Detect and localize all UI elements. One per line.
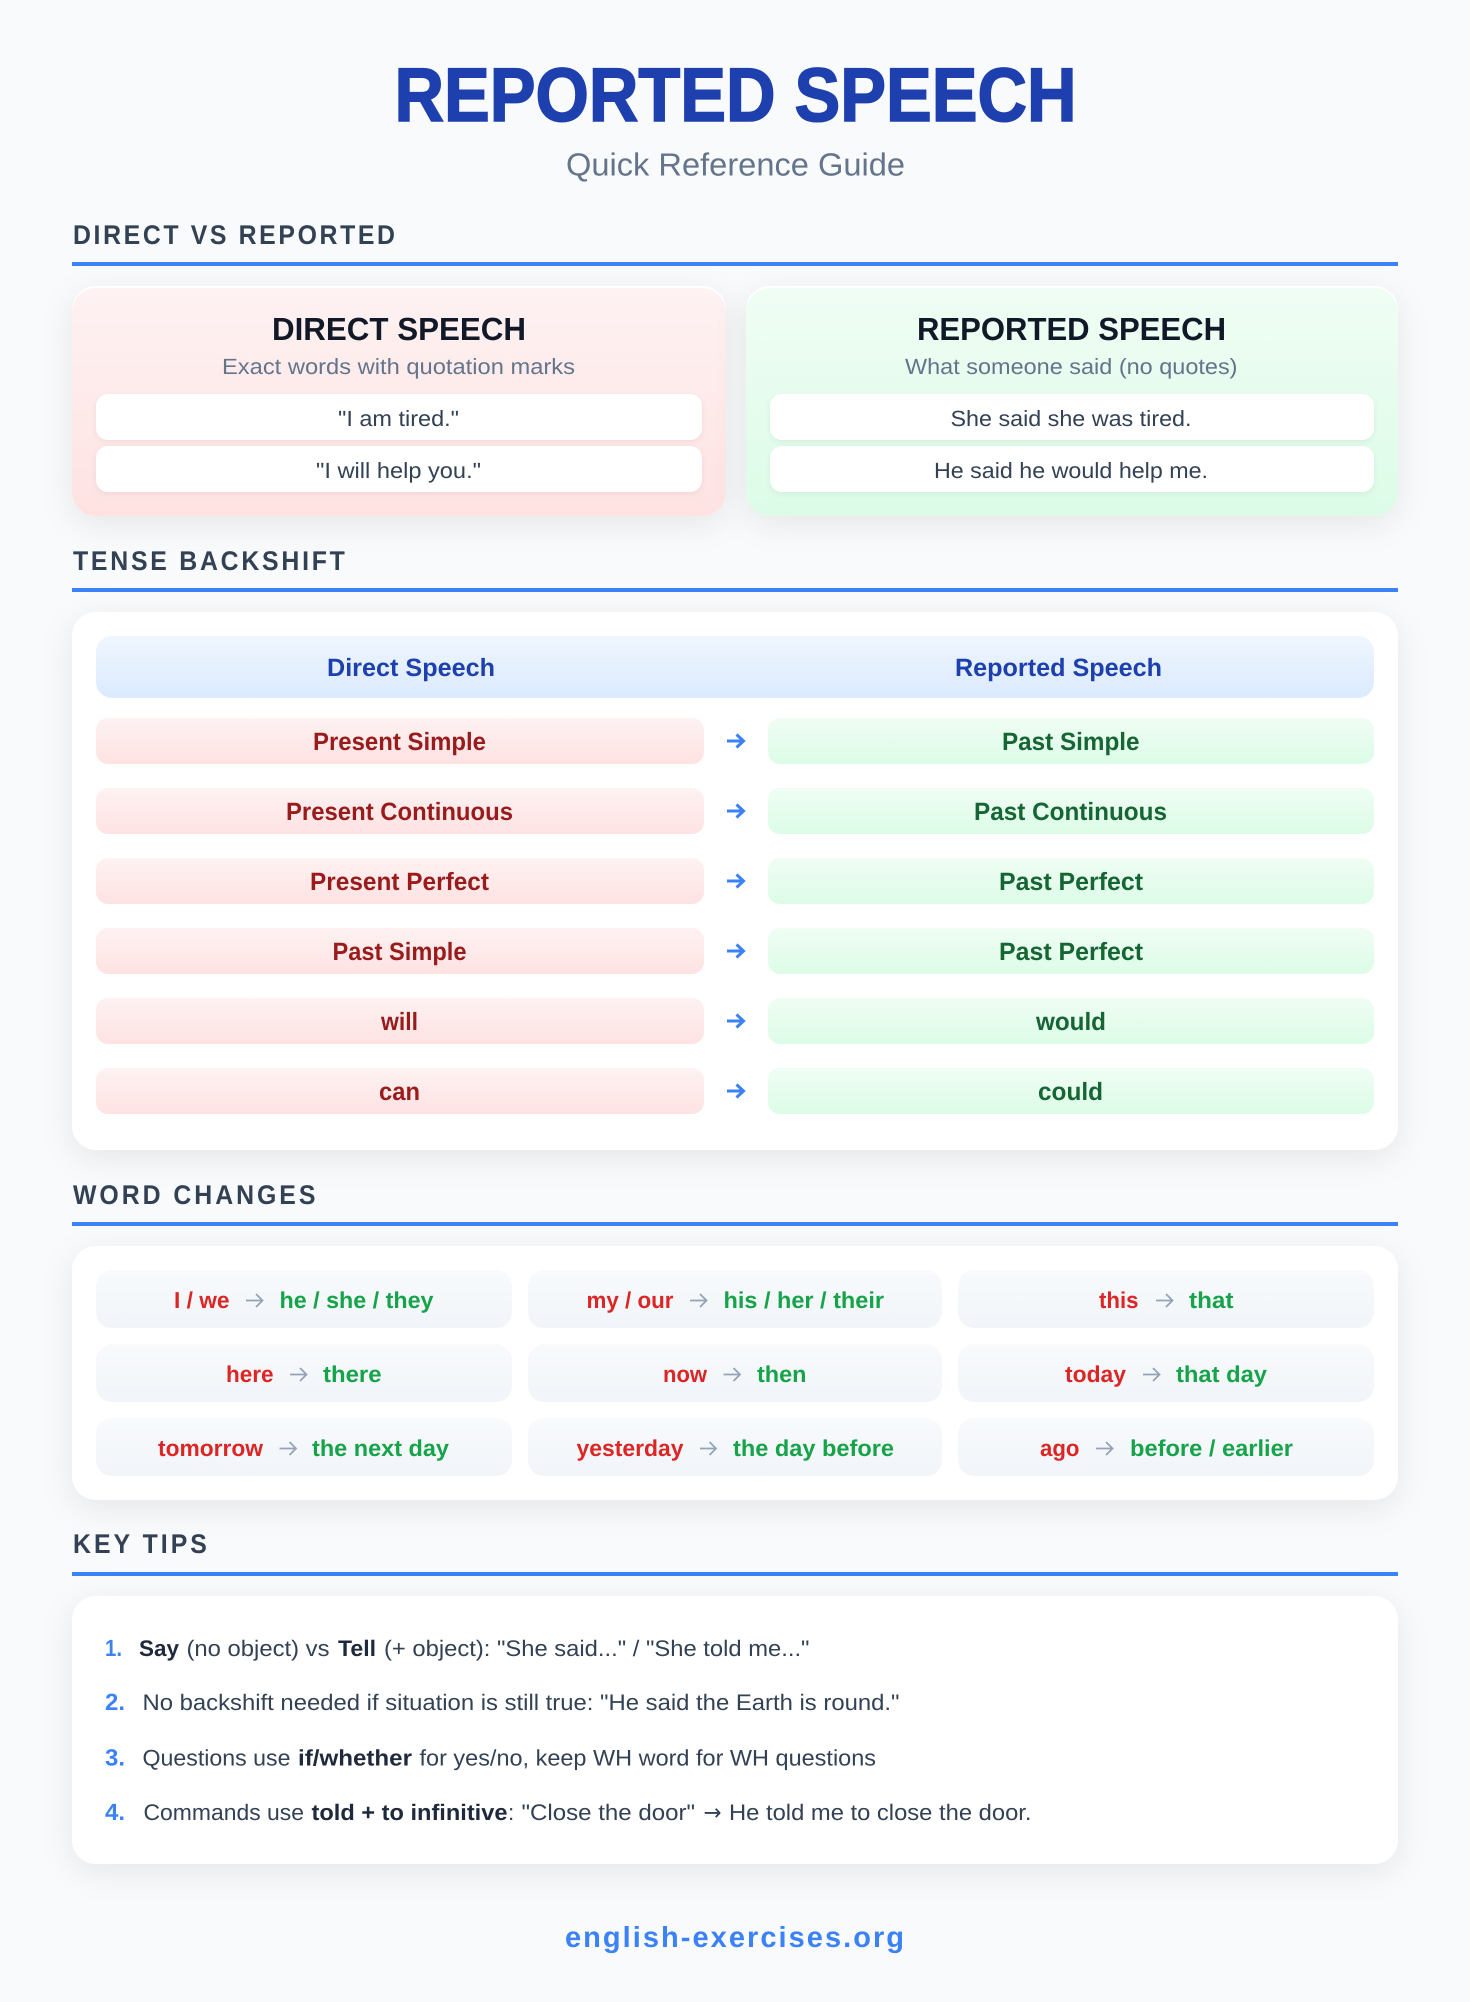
row: past simple: Past Perfect <box>999 938 1144 966</box>
cell: here <box>96 1344 512 1402</box>
cell: here: there <box>323 1361 382 1387</box>
cell: tomorrow <box>96 1418 512 1476</box>
cell: ago <box>958 1418 1374 1476</box>
cell: today: that day <box>1176 1361 1267 1387</box>
cell: my / our <box>528 1270 942 1328</box>
reported example 1 <box>770 394 1374 440</box>
cell: I / we: he / she / they <box>280 1287 434 1313</box>
row: present perfect <box>96 858 1374 904</box>
cell: ago: before / earlier <box>1130 1435 1293 1461</box>
tip 4: Commands use <box>144 1800 304 1825</box>
table header <box>96 636 1374 698</box>
row: will <box>96 998 1374 1044</box>
cell: this <box>958 1270 1374 1328</box>
tip 2: No backshift needed if situation is still true: "He said the Earth is round." <box>142 1690 900 1715</box>
cell: I / we <box>96 1270 512 1328</box>
row: present perfect: Present Perfect <box>310 868 490 896</box>
cell: now <box>528 1344 942 1402</box>
row: present perfect: Past Perfect <box>999 868 1144 896</box>
reported speech description: What someone said (no quotes) <box>905 354 1238 379</box>
footer: website: english-exercises.org <box>565 1922 904 1954</box>
row: will: would <box>1035 1008 1106 1036</box>
tip 3: Questions use <box>142 1746 290 1770</box>
cell: today <box>958 1344 1374 1402</box>
row: will: will <box>380 1008 418 1036</box>
tip 3: 3. <box>105 1744 125 1770</box>
tip 1: Tell <box>338 1636 376 1661</box>
cell: my / our: his / her / their <box>724 1287 884 1313</box>
tip 1: Say <box>139 1636 179 1661</box>
heading: word changes: WORD CHANGES <box>73 1180 315 1210</box>
direct example 2: "I will help you." <box>316 458 481 483</box>
cell: tomorrow: tomorrow <box>158 1435 263 1461</box>
direct example 2 <box>96 446 702 492</box>
tip 4: : <box>508 1800 514 1825</box>
cell: yesterday <box>528 1418 942 1476</box>
cell: tomorrow: the next day <box>312 1435 449 1461</box>
panel: reported speech <box>746 286 1398 516</box>
cell: I / we: I / we <box>174 1287 230 1313</box>
cell: this: this <box>1099 1287 1138 1313</box>
tip 4: → <box>704 1800 722 1826</box>
cell: this: that <box>1189 1287 1234 1313</box>
tip 2: 2. <box>105 1689 125 1715</box>
cell: ago: ago <box>1040 1435 1080 1461</box>
row: present simple <box>96 718 1374 764</box>
cell: yesterday: yesterday <box>576 1435 684 1461</box>
panel: tense backshift table <box>72 612 1398 1150</box>
panel: direct speech <box>72 286 726 516</box>
direct speech description: Exact words with quotation marks <box>222 354 575 379</box>
row: can <box>96 1068 1374 1114</box>
table header: Direct Speech <box>327 654 495 682</box>
cell: my / our: my / our <box>586 1287 674 1313</box>
row: present continuous <box>96 788 1374 834</box>
direct speech heading: DIRECT SPEECH <box>272 311 526 347</box>
title: REPORTED SPEECH <box>394 53 1076 138</box>
heading: direct vs reported: DIRECT VS REPORTED <box>73 220 395 250</box>
tip 4 <box>105 1799 1032 1826</box>
row: present continuous: Past Continuous <box>974 798 1167 826</box>
row: can: could <box>1038 1078 1103 1106</box>
direct example 1 <box>96 394 702 440</box>
tip 4: He told me to close the door. <box>729 1800 1032 1825</box>
tip 1: 1. <box>105 1635 122 1661</box>
panel: key tips <box>72 1596 1398 1864</box>
heading: key tips: KEY TIPS <box>73 1529 207 1559</box>
direct example 1: "I am tired." <box>338 406 459 431</box>
tip 3: for yes/no, keep WH word for WH questions <box>420 1746 876 1770</box>
row: can: can <box>379 1078 420 1106</box>
cell: here: here <box>226 1361 274 1387</box>
reported speech heading: REPORTED SPEECH <box>917 311 1226 347</box>
subtitle: Quick Reference Guide <box>566 146 905 182</box>
row: past simple: Past Simple <box>332 938 467 966</box>
tip 3 <box>105 1744 876 1770</box>
heading: tense backshift: TENSE BACKSHIFT <box>73 546 345 576</box>
cell: now: now <box>663 1361 707 1387</box>
row: present continuous: Present Continuous <box>286 798 513 826</box>
cell: yesterday: the day before <box>733 1435 894 1461</box>
tip 3: if/whether <box>298 1746 412 1770</box>
tip 1: (no object) vs <box>186 1636 330 1661</box>
reported example 2: He said he would help me. <box>934 458 1208 483</box>
tip 4: "Close the door" <box>522 1800 695 1825</box>
row: present simple: Present Simple <box>313 728 486 756</box>
reported example 2 <box>770 446 1374 492</box>
cell: now: then <box>757 1361 806 1387</box>
tip 1: (+ object): "She said..." / "She told me..." <box>384 1636 810 1661</box>
row: present simple: Past Simple <box>1002 728 1140 756</box>
tip 4: 4. <box>105 1799 125 1825</box>
cell: today: today <box>1065 1361 1126 1387</box>
row: past simple <box>96 928 1374 974</box>
panel: word changes <box>72 1246 1398 1500</box>
table header: Reported Speech <box>955 654 1162 682</box>
tip 1 <box>105 1635 810 1661</box>
tip 4: told + to infinitive <box>312 1800 508 1825</box>
reported example 1: She said she was tired. <box>950 406 1192 431</box>
